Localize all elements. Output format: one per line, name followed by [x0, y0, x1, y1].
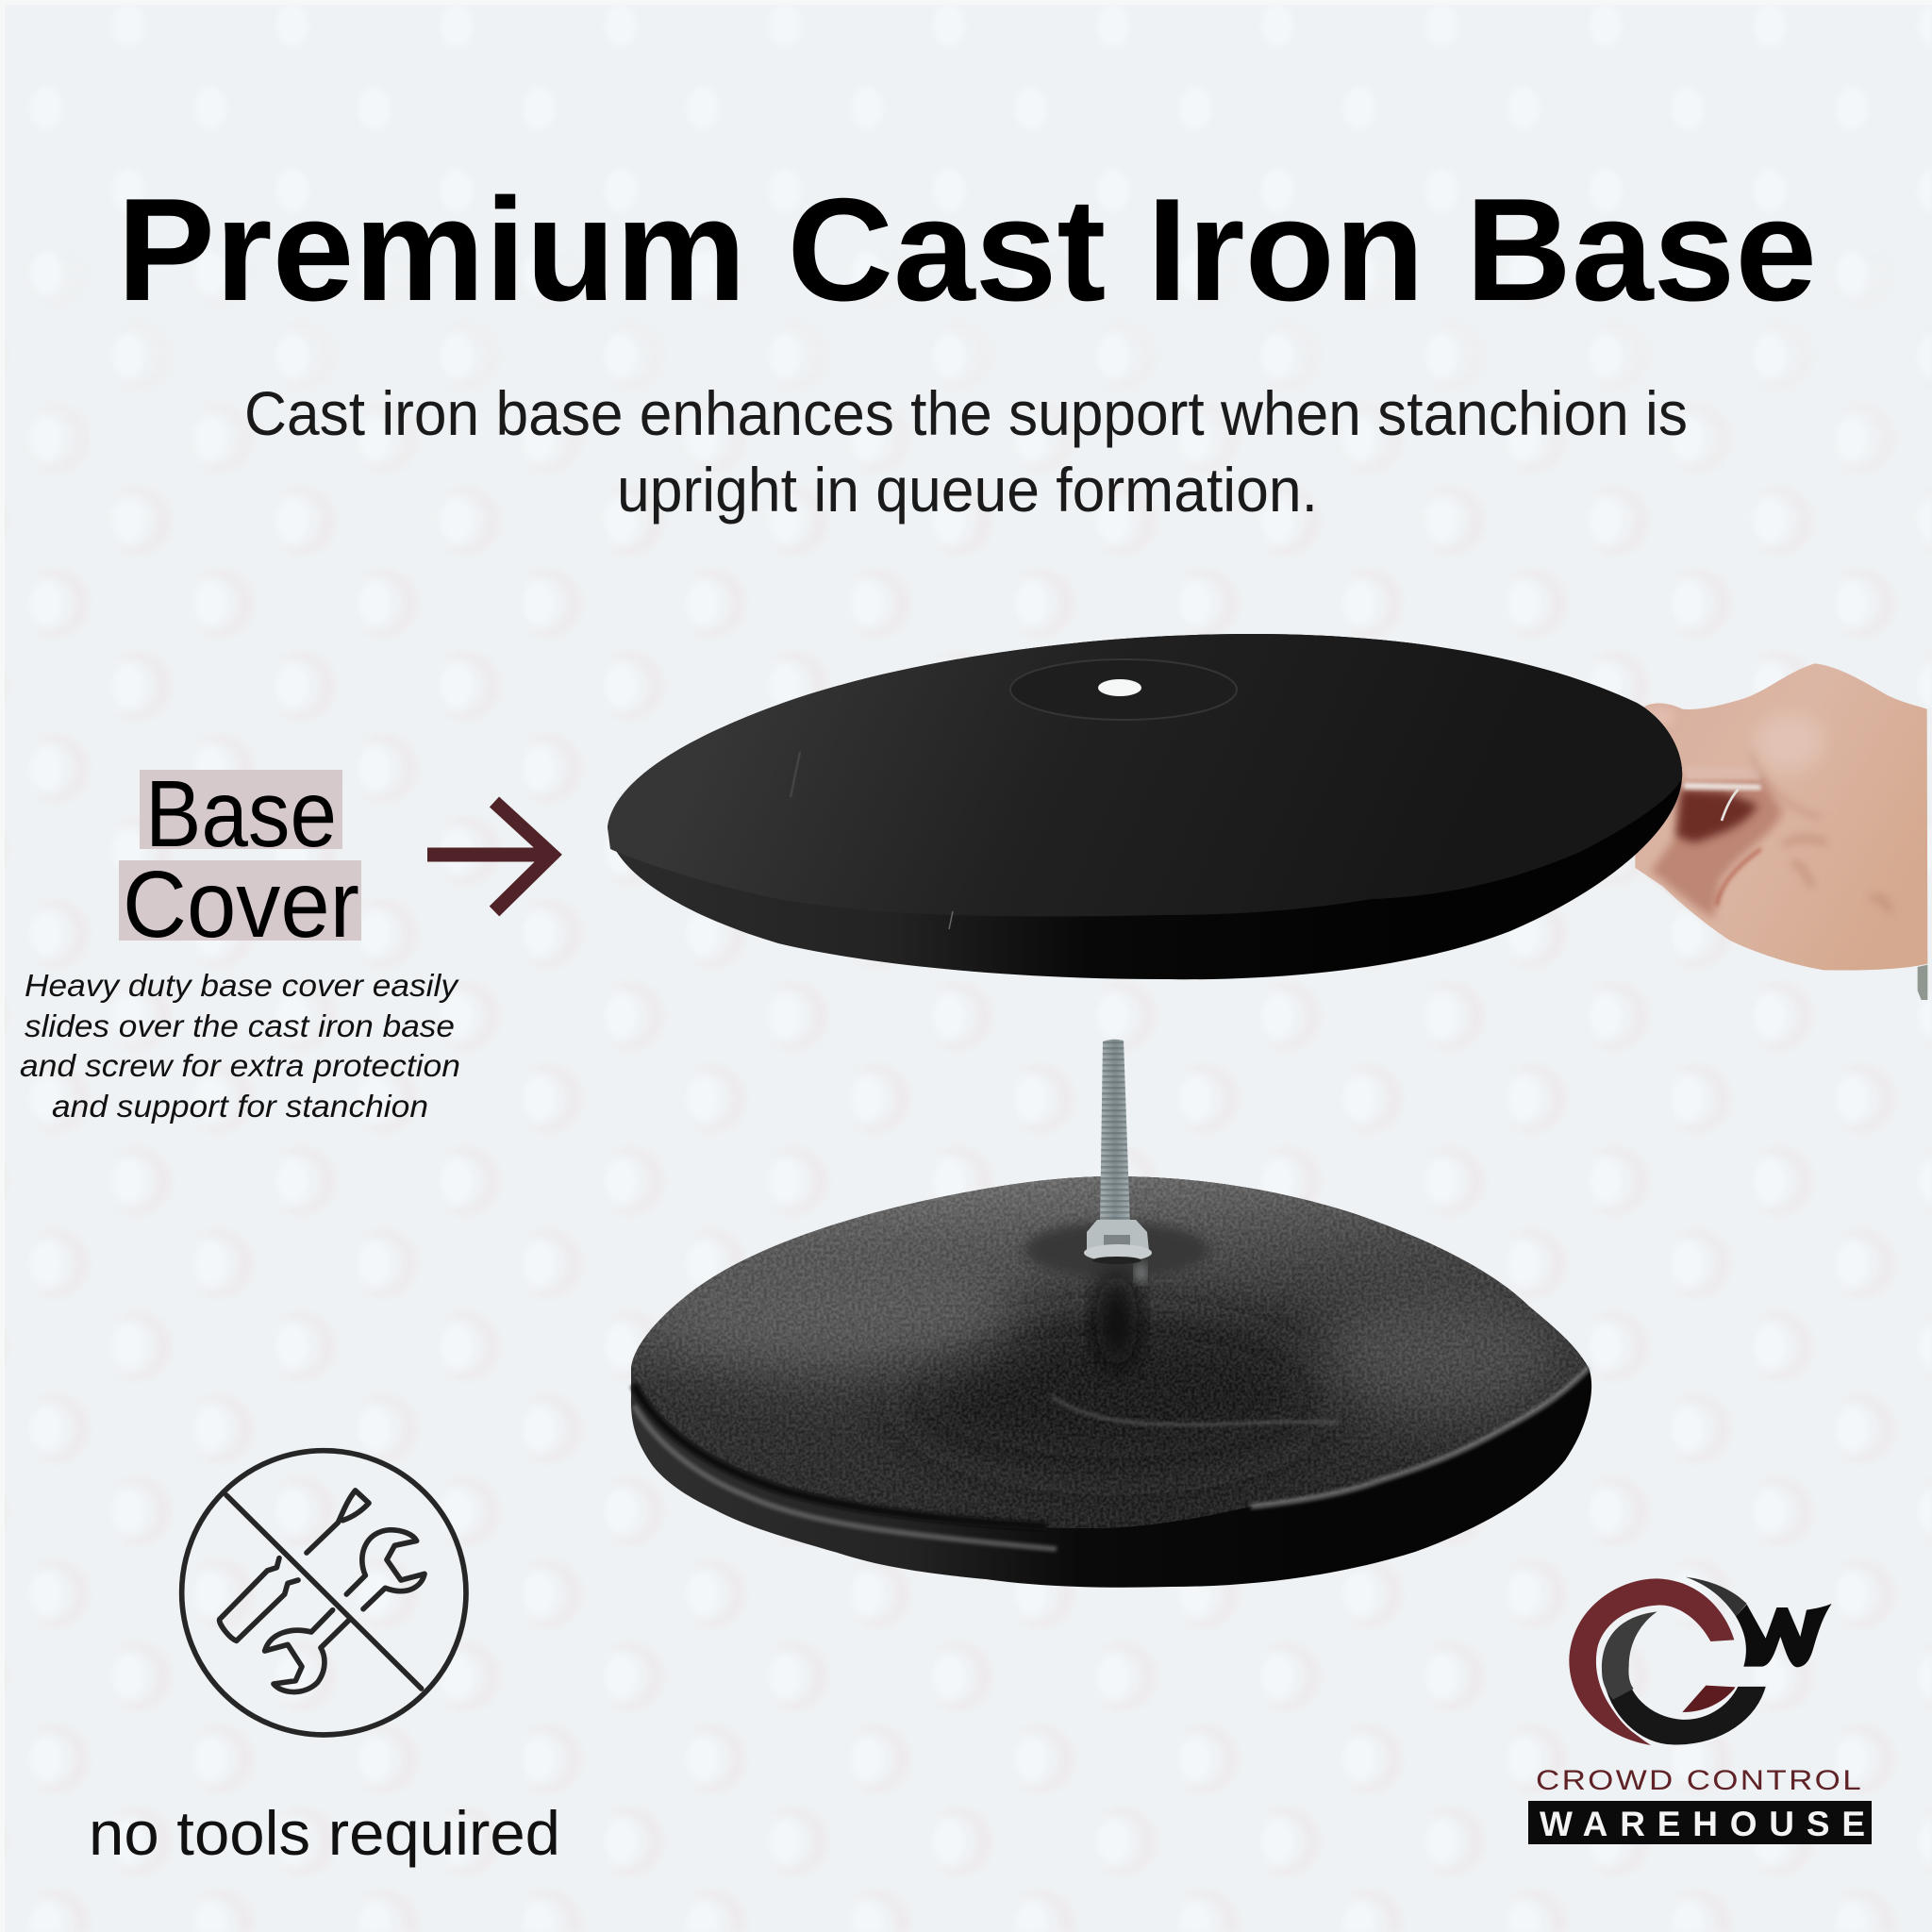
description text: and screw for extra protection: [20, 1048, 460, 1083]
description text: slides over the cast iron base: [25, 1008, 455, 1043]
hand holding the base cover: [1635, 663, 1927, 1000]
caption: no tools required: no tools required: [89, 1798, 560, 1868]
title: Premium Cast Iron Base: [117, 168, 1817, 331]
logo: Crowd Control Warehouse: [1528, 1577, 1872, 1844]
label: Base Cover: Base: [145, 761, 337, 867]
bolt and nut: [1084, 1040, 1152, 1264]
logo: Crowd Control Warehouse: WAREHOUSE: [1540, 1805, 1865, 1843]
label: Base Cover: Cover: [123, 852, 359, 958]
logo: Crowd Control Warehouse: CROWD CONTROL: [1536, 1765, 1863, 1796]
description text: Heavy duty base cover easily: [25, 968, 460, 1003]
label: Base Cover: [119, 761, 361, 958]
arrow pointing to cover: [427, 802, 552, 911]
subtitle: upright in queue formation.: [617, 455, 1318, 525]
subtitle: Cast iron base enhances the support when stanchion is: [244, 378, 1688, 448]
center hub of cover: [1010, 659, 1237, 720]
photo: base cover disc: [608, 634, 1682, 979]
photo: cast iron base: [631, 1176, 1591, 1588]
center hub of base: [1024, 1222, 1209, 1368]
icon: no tools required: [182, 1451, 466, 1735]
description text: [20, 968, 460, 1124]
description text: and support for stanchion: [52, 1089, 428, 1124]
subtitle: [244, 378, 1688, 525]
